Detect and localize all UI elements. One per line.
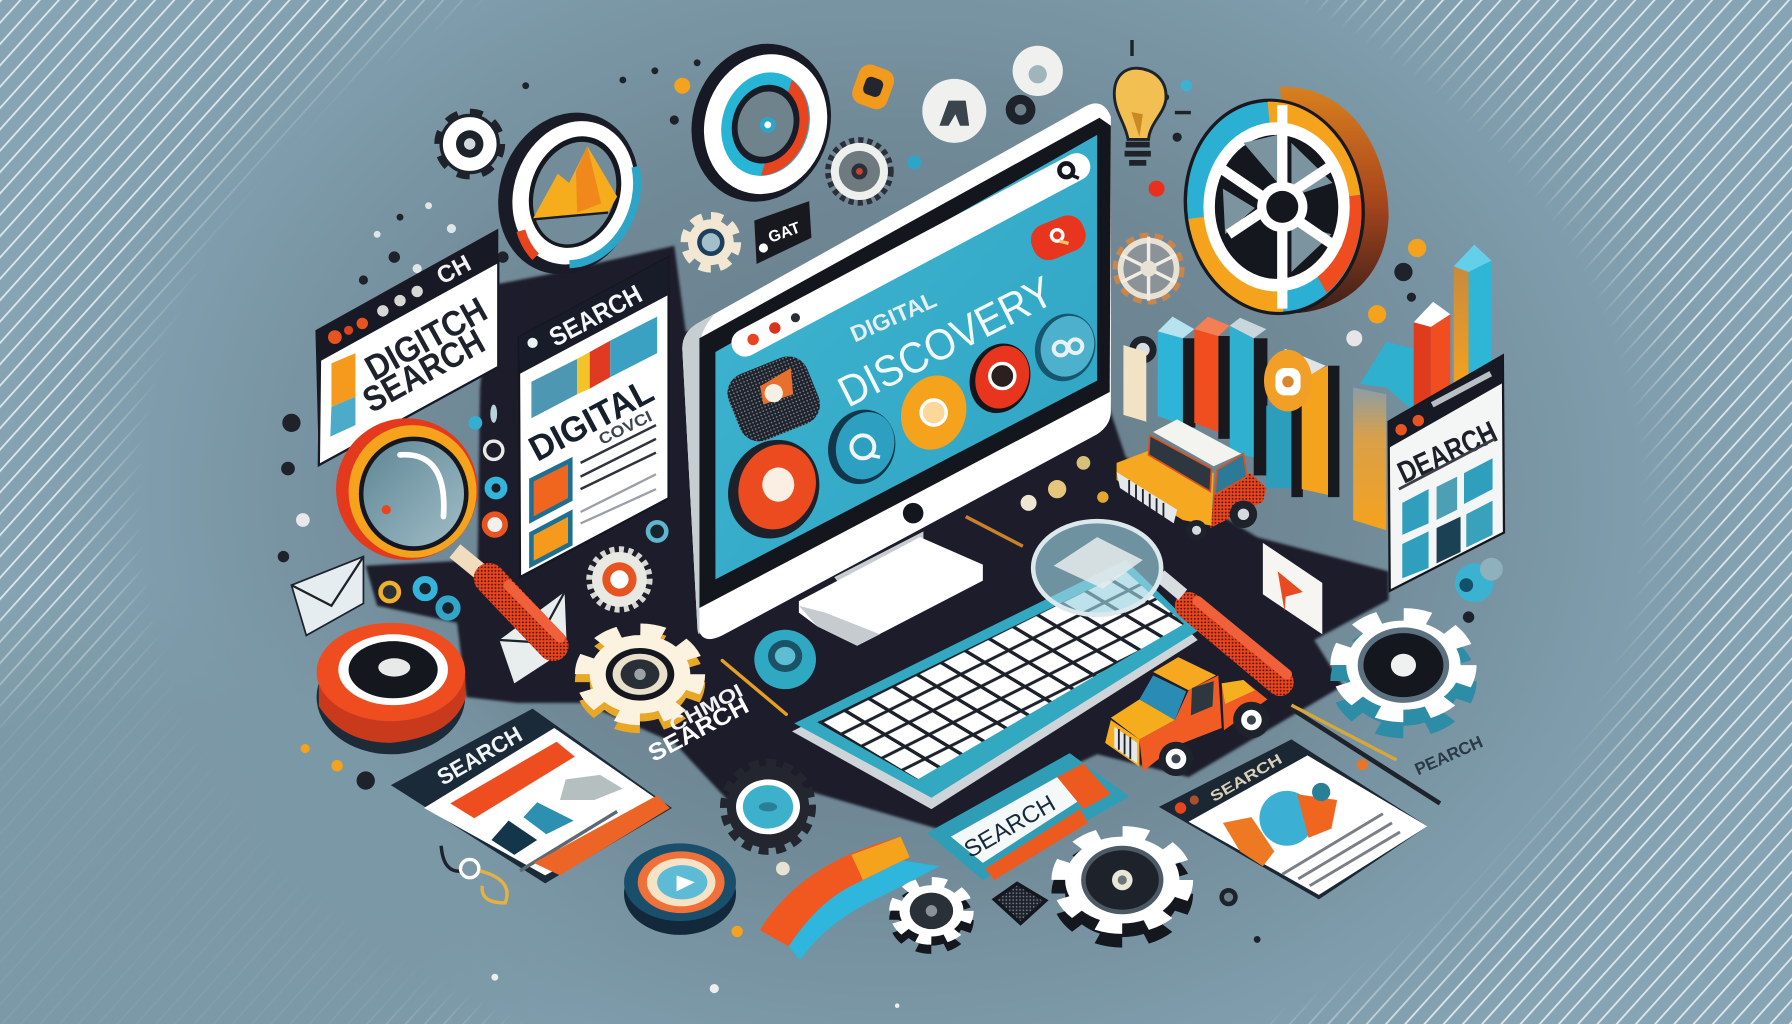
scattered particles <box>278 59 1503 1008</box>
monitor <box>682 103 1111 646</box>
ribbon banner <box>760 837 939 960</box>
gear: dark teal centre <box>727 766 809 848</box>
label: SEARCH: SEARCH <box>544 279 647 352</box>
swirl mark bottom left <box>441 846 507 903</box>
monitor frame <box>682 103 1111 639</box>
gear: large black white <box>1065 837 1179 937</box>
wheel icon <box>1170 87 1389 327</box>
gear: white teal right <box>1346 621 1461 726</box>
tag icon with label <box>754 201 811 264</box>
search tab <box>927 753 1129 880</box>
search tab: SEARCH <box>960 790 1060 864</box>
window tab label: CH <box>432 250 476 290</box>
icon: light bulb <box>1114 40 1191 166</box>
keyboard <box>792 560 1198 809</box>
card: CHMOI SEARCH: CHMOI <box>666 680 747 737</box>
screen icon: red circle <box>712 425 835 554</box>
truck: lower <box>1105 657 1270 776</box>
window: DIGITCH SEARCH <box>315 229 498 465</box>
screen icon: yellow <box>891 366 977 459</box>
pointer and pale icons <box>966 517 1440 803</box>
gear: small black white <box>899 885 963 946</box>
icon: orange badge <box>1264 350 1312 411</box>
icon: small teal disc <box>754 630 816 689</box>
monitor bezel <box>699 118 1111 608</box>
window heading: SEARCH <box>356 321 491 421</box>
ring icon: mountain <box>476 93 661 294</box>
gear: top left <box>441 115 498 173</box>
wheel side <box>1280 87 1389 313</box>
truck: upper <box>1117 419 1266 541</box>
label: DIGITAL: DIGITAL <box>522 371 660 469</box>
gear: gold <box>590 635 690 722</box>
red pill button <box>1026 210 1091 265</box>
window: DIGITAL article <box>519 257 669 577</box>
search bar <box>745 163 1079 345</box>
screen icon: red search <box>960 335 1040 422</box>
gear: gray <box>831 143 888 200</box>
monitor stand <box>799 531 983 646</box>
wheel rim <box>1174 91 1375 323</box>
ring icon: target <box>671 25 851 220</box>
monitor screen <box>715 135 1097 579</box>
small icons above monitor <box>849 46 1063 169</box>
red puck <box>317 623 465 754</box>
window: DEARCH <box>1389 355 1504 591</box>
line accent gold <box>722 661 786 714</box>
search card: chart <box>391 709 672 883</box>
icon: envelope center <box>499 592 567 683</box>
article label: SEARCH <box>1208 752 1285 806</box>
magnifier handle <box>455 551 560 646</box>
card label: pencil search: PEARCH <box>1411 731 1486 779</box>
magnifier: glass on keyboard <box>1033 521 1287 682</box>
disc: target <box>624 843 736 935</box>
screen icon: media tile <box>721 350 826 448</box>
screen title: DISCOVERY <box>831 268 1061 417</box>
screen title: DIGITAL <box>846 286 940 347</box>
icon: mesh pad <box>994 883 1046 923</box>
gear: metallic <box>1118 237 1179 301</box>
article card <box>1159 739 1427 899</box>
icon: envelope left <box>291 557 363 635</box>
bar chart: 3D bars <box>1123 245 1491 530</box>
window heading: DIGITCH <box>358 289 494 389</box>
card label: SEARCH <box>432 721 527 790</box>
article picture <box>1223 783 1337 866</box>
dark backdrop cluster <box>366 246 1389 829</box>
monitor camera dot <box>903 503 923 523</box>
gear: cream <box>688 219 734 265</box>
window: play card <box>1263 543 1322 634</box>
label: COVCI: COVCI <box>596 408 655 449</box>
screen icon: teal loop <box>1025 305 1105 390</box>
tag icon with label: GAT <box>766 220 803 247</box>
gear: white orange <box>592 552 647 607</box>
small bubbles left <box>381 405 666 617</box>
magnifier: left <box>336 418 560 646</box>
card: CHMOI SEARCH: SEARCH <box>644 692 753 768</box>
label: DEARCH: DEARCH <box>1392 414 1502 490</box>
icon: teal bubble right <box>1224 578 1473 902</box>
screen icon: teal search <box>818 400 906 494</box>
